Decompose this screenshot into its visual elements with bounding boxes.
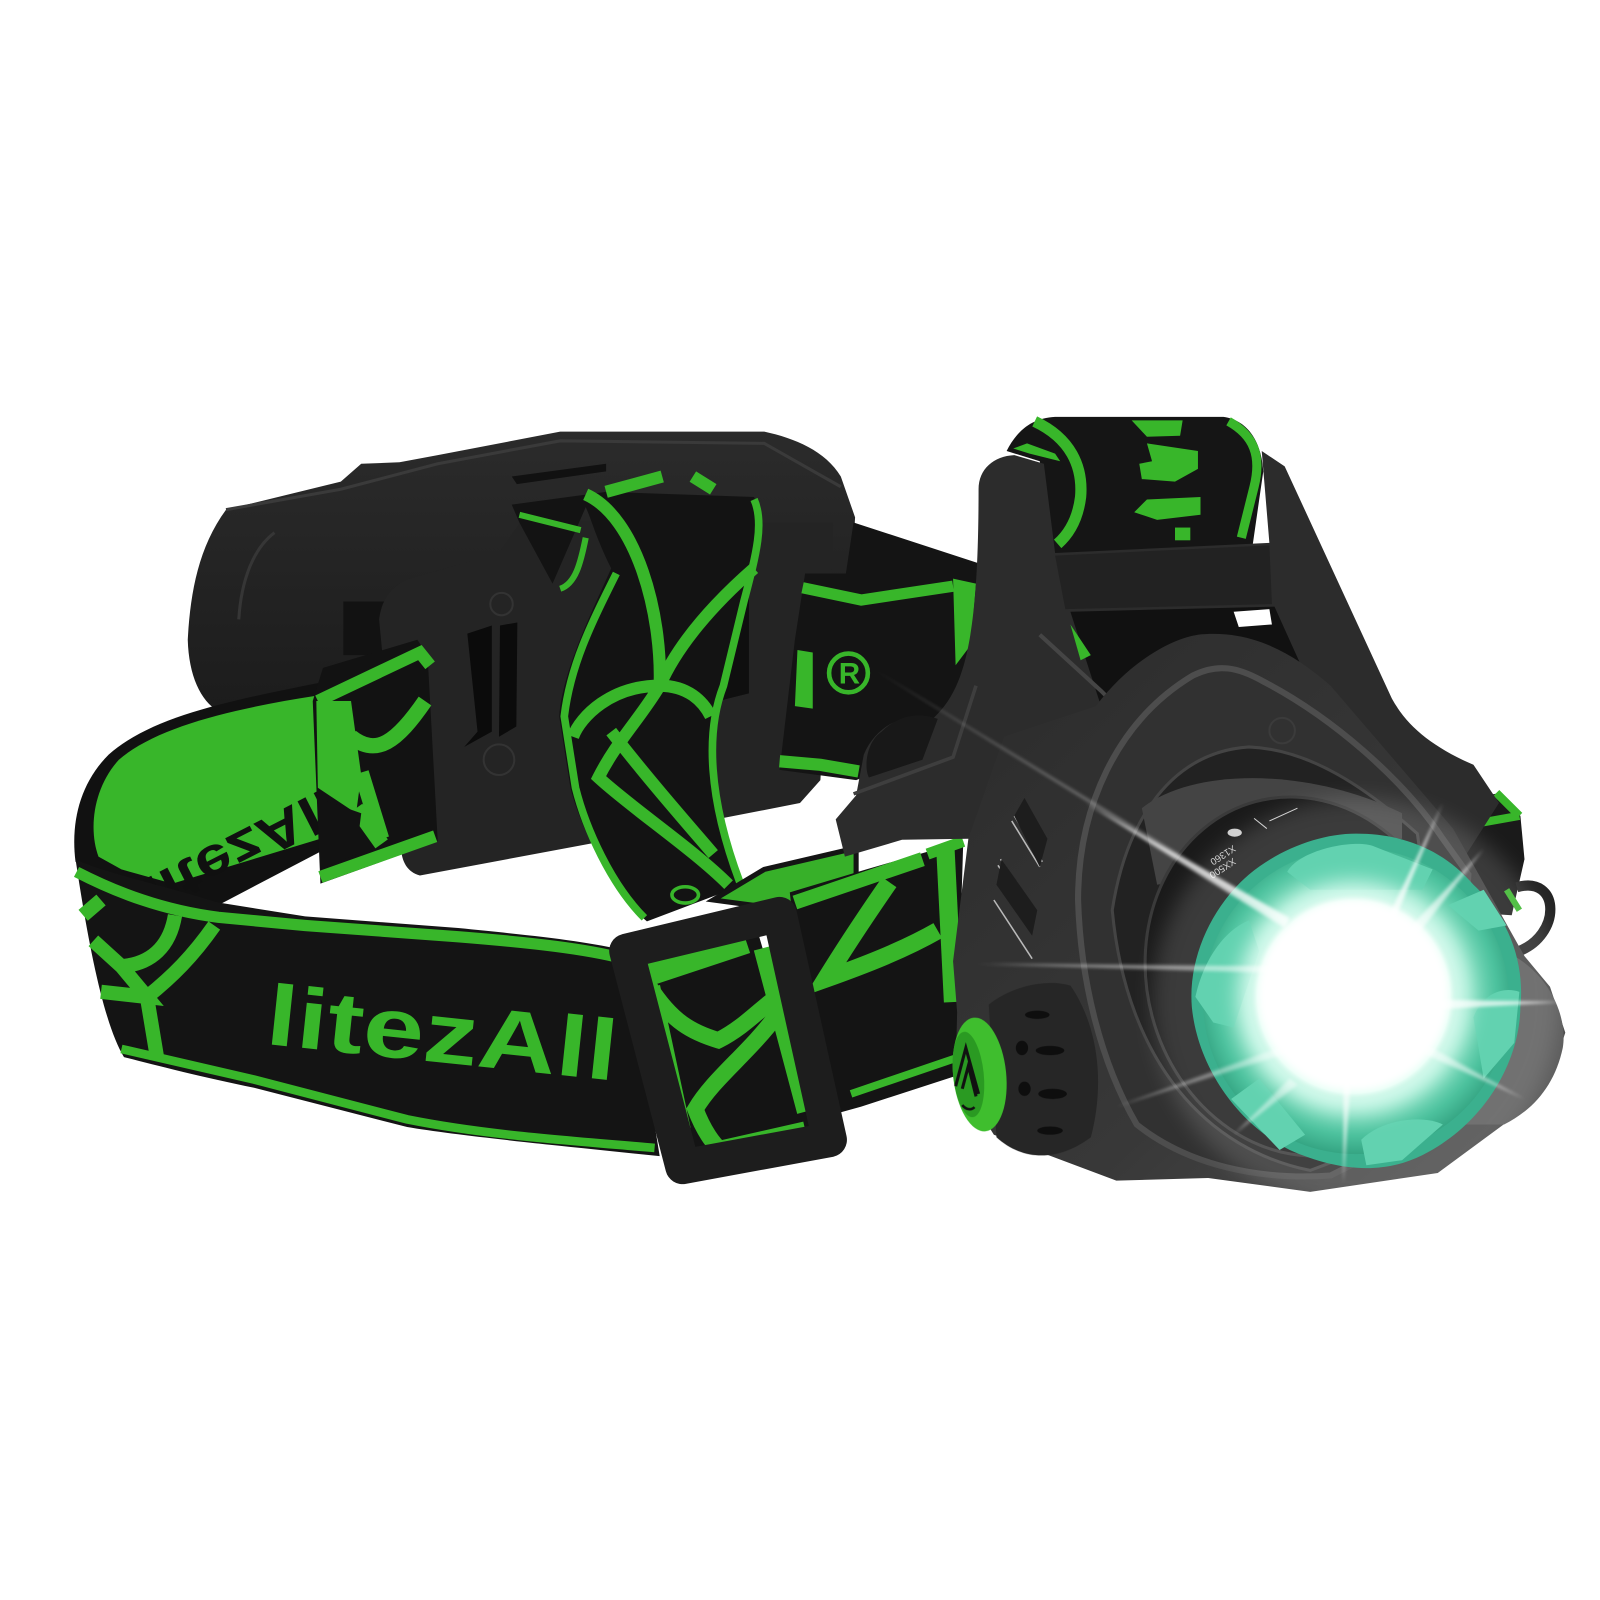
headlamp bracket [836, 451, 1499, 961]
back mounting plate [379, 520, 833, 876]
plate slots [464, 622, 517, 747]
barrel markings: XX500 [1206, 855, 1237, 880]
barrel markings: X1360 [1207, 842, 1237, 867]
front strap [76, 859, 660, 1156]
folded strap loop [313, 640, 438, 884]
front bezel [1191, 834, 1521, 1168]
knob [989, 983, 1098, 1155]
rear strap beyond housing [1433, 793, 1524, 915]
strap behind the buckle [637, 848, 856, 1163]
registered mark [829, 654, 868, 692]
right strap segment [780, 522, 979, 780]
top head strap loop [1007, 417, 1263, 553]
power cable [1517, 886, 1550, 952]
inner cone [1112, 747, 1458, 1170]
lens glow [1239, 882, 1468, 1112]
soft haze around bezel [1152, 798, 1560, 1206]
bezel lobes [1195, 844, 1519, 1165]
strap logo text: litezAll [262, 967, 622, 1100]
zoom gear collar [1142, 778, 1402, 885]
barrel markings [1206, 808, 1297, 880]
light streaks [871, 668, 1563, 1183]
vertical strap [512, 477, 760, 921]
registered mark: R [839, 658, 860, 691]
housing contour ring [1078, 668, 1468, 1176]
main housing [953, 634, 1565, 1192]
adjustment knob and button [947, 983, 1098, 1155]
rear assembly [74, 432, 856, 1163]
right strap section and cable [780, 417, 1565, 1206]
battery box [188, 432, 855, 711]
strap lettering on top loop [1132, 420, 1201, 540]
knurled barrel [1105, 761, 1500, 1192]
mirrored strap lettering: litezAll [134, 776, 347, 924]
strap inner side green [74, 683, 347, 924]
rear lower lobe [1463, 956, 1564, 1124]
vent slits [994, 816, 1042, 959]
green power button [947, 1015, 1012, 1134]
buckle [627, 914, 830, 1167]
strap between buckle and housing [790, 841, 963, 1119]
